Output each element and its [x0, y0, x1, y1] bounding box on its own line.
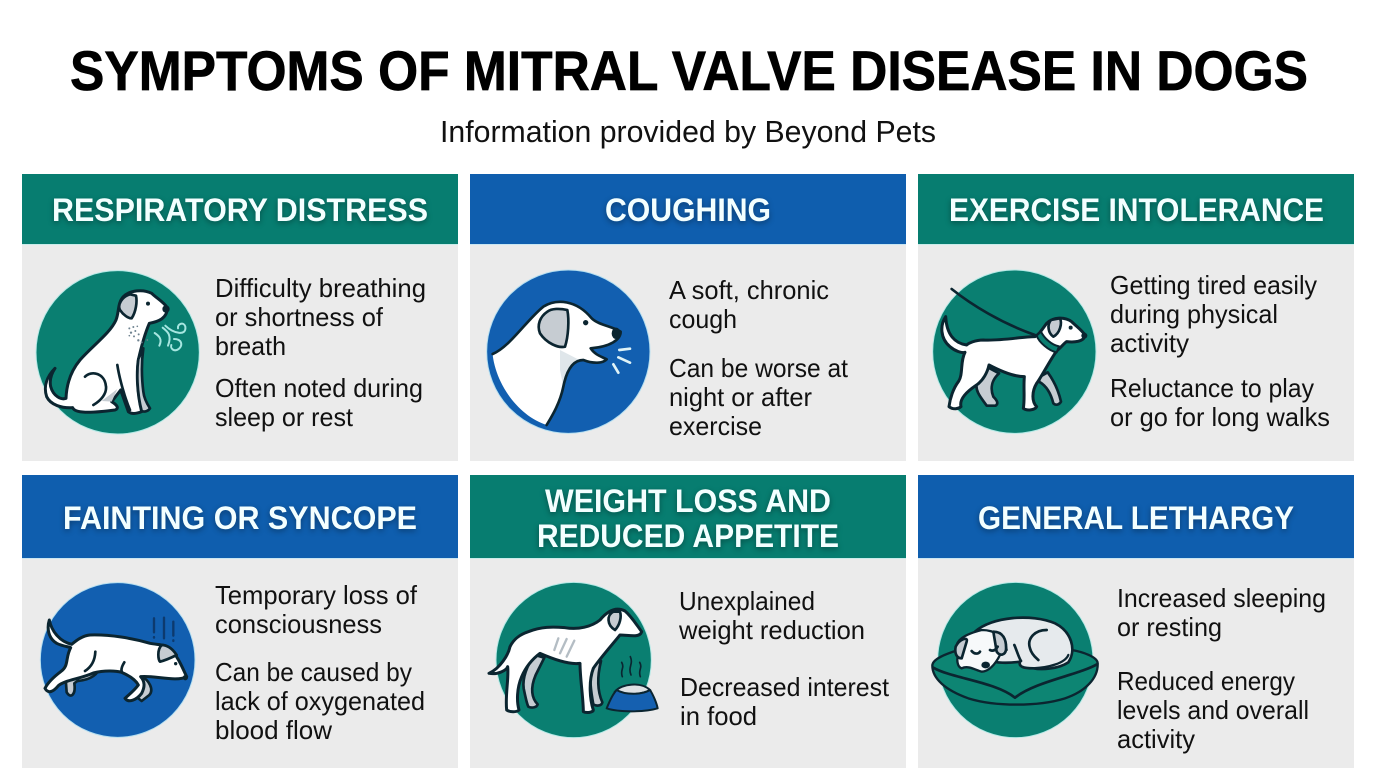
header: weight loss and reduced appetite: REDUCED APPETITE — [537, 518, 839, 554]
text: general lethargy: Reduced energy — [1117, 666, 1295, 696]
icon: dog sleeping on a cushion — [932, 582, 1098, 738]
text: general lethargy: or resting — [1117, 612, 1222, 642]
header: general lethargy — [918, 475, 1354, 559]
text: general lethargy: Increased sleeping — [1117, 583, 1326, 613]
text: respiratory distress — [215, 273, 426, 432]
icon: coughing dog head — [487, 270, 650, 433]
text: fainting or syncope: Can be caused by — [215, 657, 412, 687]
subtitle: Information provided by Beyond Pets — [440, 114, 936, 149]
text: general lethargy — [1117, 583, 1326, 754]
text: respiratory distress: Often noted during — [215, 373, 423, 403]
header: respiratory distress — [22, 174, 458, 245]
panel: coughing — [470, 174, 906, 461]
header: exercise intolerance — [918, 174, 1354, 245]
text: respiratory distress: sleep or rest — [215, 402, 354, 432]
header: weight loss and reduced appetite — [470, 475, 906, 559]
text: exercise intolerance: or go for long walks — [1110, 402, 1330, 432]
text: general lethargy: levels and overall — [1117, 695, 1309, 725]
panel: weight loss and reduced appetite — [470, 475, 906, 768]
text: coughing: Can be worse at — [669, 353, 849, 383]
text: weight loss and reduced appetite: weight reduction — [678, 615, 865, 645]
text: fainting or syncope: blood flow — [215, 715, 332, 745]
header: exercise intolerance: EXERCISE INTOLERANCE — [949, 192, 1324, 228]
text: coughing: exercise — [669, 411, 762, 441]
panel: respiratory distress — [22, 174, 458, 461]
icon: thin dog and food bowl — [489, 582, 658, 738]
text: coughing — [669, 275, 849, 441]
text: exercise intolerance: Reluctance to play — [1110, 373, 1314, 403]
text: exercise intolerance: during physical — [1110, 299, 1278, 329]
header: respiratory distress: RESPIRATORY DISTRESS — [52, 192, 428, 228]
text: exercise intolerance: activity — [1110, 328, 1189, 358]
text: general lethargy: activity — [1117, 724, 1195, 754]
text: respiratory distress: or shortness of — [215, 302, 384, 332]
text: exercise intolerance: Getting tired easily — [1110, 270, 1317, 300]
text: weight loss and reduced appetite: Decreased interest — [680, 672, 890, 702]
text: fainting or syncope: Temporary loss of — [215, 580, 418, 610]
panel: fainting or syncope — [22, 475, 458, 768]
text: coughing: A soft, chronic — [669, 275, 829, 305]
text: respiratory distress: breath — [215, 331, 286, 361]
text: weight loss and reduced appetite: in food — [680, 701, 757, 731]
icon: collapsing dog — [40, 583, 195, 737]
text: weight loss and reduced appetite — [678, 586, 890, 731]
title: SYMPTOMS OF MITRAL VALVE DISEASE IN DOGS — [70, 39, 1308, 102]
header: fainting or syncope — [22, 475, 458, 559]
text: weight loss and reduced appetite: Unexplained — [679, 586, 815, 616]
panel: general lethargy — [918, 475, 1354, 768]
text: coughing: cough — [669, 304, 737, 334]
text: coughing: night or after — [669, 382, 812, 412]
icon: dog on a leash — [933, 270, 1096, 433]
header: coughing: COUGHING — [605, 192, 771, 228]
text: respiratory distress: Difficulty breathing — [215, 273, 426, 303]
header: weight loss and reduced appetite: WEIGHT LOSS AND — [545, 483, 831, 519]
panel: exercise intolerance — [918, 174, 1354, 461]
text: fainting or syncope — [215, 580, 425, 745]
header: general lethargy: GENERAL LETHARGY — [978, 500, 1294, 536]
header: fainting or syncope: FAINTING OR SYNCOPE — [63, 500, 417, 536]
text: exercise intolerance — [1110, 270, 1330, 432]
icon: sitting dog breathing hard — [36, 271, 199, 434]
text: fainting or syncope: consciousness — [215, 609, 382, 639]
header: coughing — [470, 174, 906, 245]
text: fainting or syncope: lack of oxygenated — [215, 686, 425, 716]
